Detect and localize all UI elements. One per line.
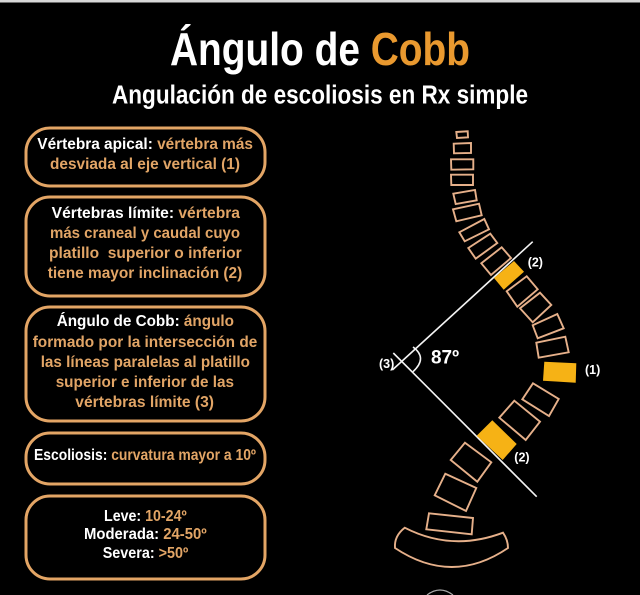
panel: severidad [26,496,265,579]
panel: ángulo de Cobb: formado por la intersección de [33,334,258,351]
label: (3): (3) [379,357,394,371]
panel: vértebras límite [26,197,265,296]
panel: escoliosis: Escoliosis: curvatura mayor a 10º [34,447,256,464]
angle value: 87º [431,348,459,368]
apical vertebra [543,362,576,383]
panel: vértebras límite: Vértebras límite: vértebra [52,205,240,222]
lower limit vertebra [477,420,517,460]
title: Ángulo de Cobb [170,23,470,75]
panel: severidad: Leve: 10-24º [104,508,187,525]
panel: severidad: Severa: >50º [103,545,189,562]
panel: vértebra apical: Vértebra apical: vértebra más [37,136,253,153]
panel: vértebra apical [26,128,265,186]
panel: ángulo de Cobb: superior e inferior de las [56,374,234,391]
subtitle: Angulación de escoliosis en Rx simple [112,82,528,110]
angle lines [392,242,537,497]
panel: ángulo de Cobb: vértebras límite (3) [75,394,214,411]
spine diagram [395,131,569,567]
label: (1): (1) [585,363,600,377]
partial circle at bottom [427,590,453,595]
panel: severidad: Moderada: 24-50º [84,526,207,543]
panel: vértebras límite: más craneal y caudal cuyo [50,225,240,242]
label: lower (2): (2) [514,451,530,465]
panel: escoliosis [26,433,265,484]
panel: ángulo de Cobb [26,307,265,421]
upper limit vertebra [494,261,524,290]
panel: ángulo de Cobb: las líneas paralelas al platillo [41,354,250,371]
panel: vértebras límite: platillo superior o inferior [49,245,242,262]
panel: ángulo de Cobb: Ángulo de Cobb: ángulo [57,313,234,330]
panel: vértebra apical: desviada al eje vertical (1) [50,156,240,173]
pelvis [395,528,508,567]
panel: vértebras límite: tiene mayor inclinación (2) [48,265,242,282]
label: upper (2): (2) [528,256,543,270]
